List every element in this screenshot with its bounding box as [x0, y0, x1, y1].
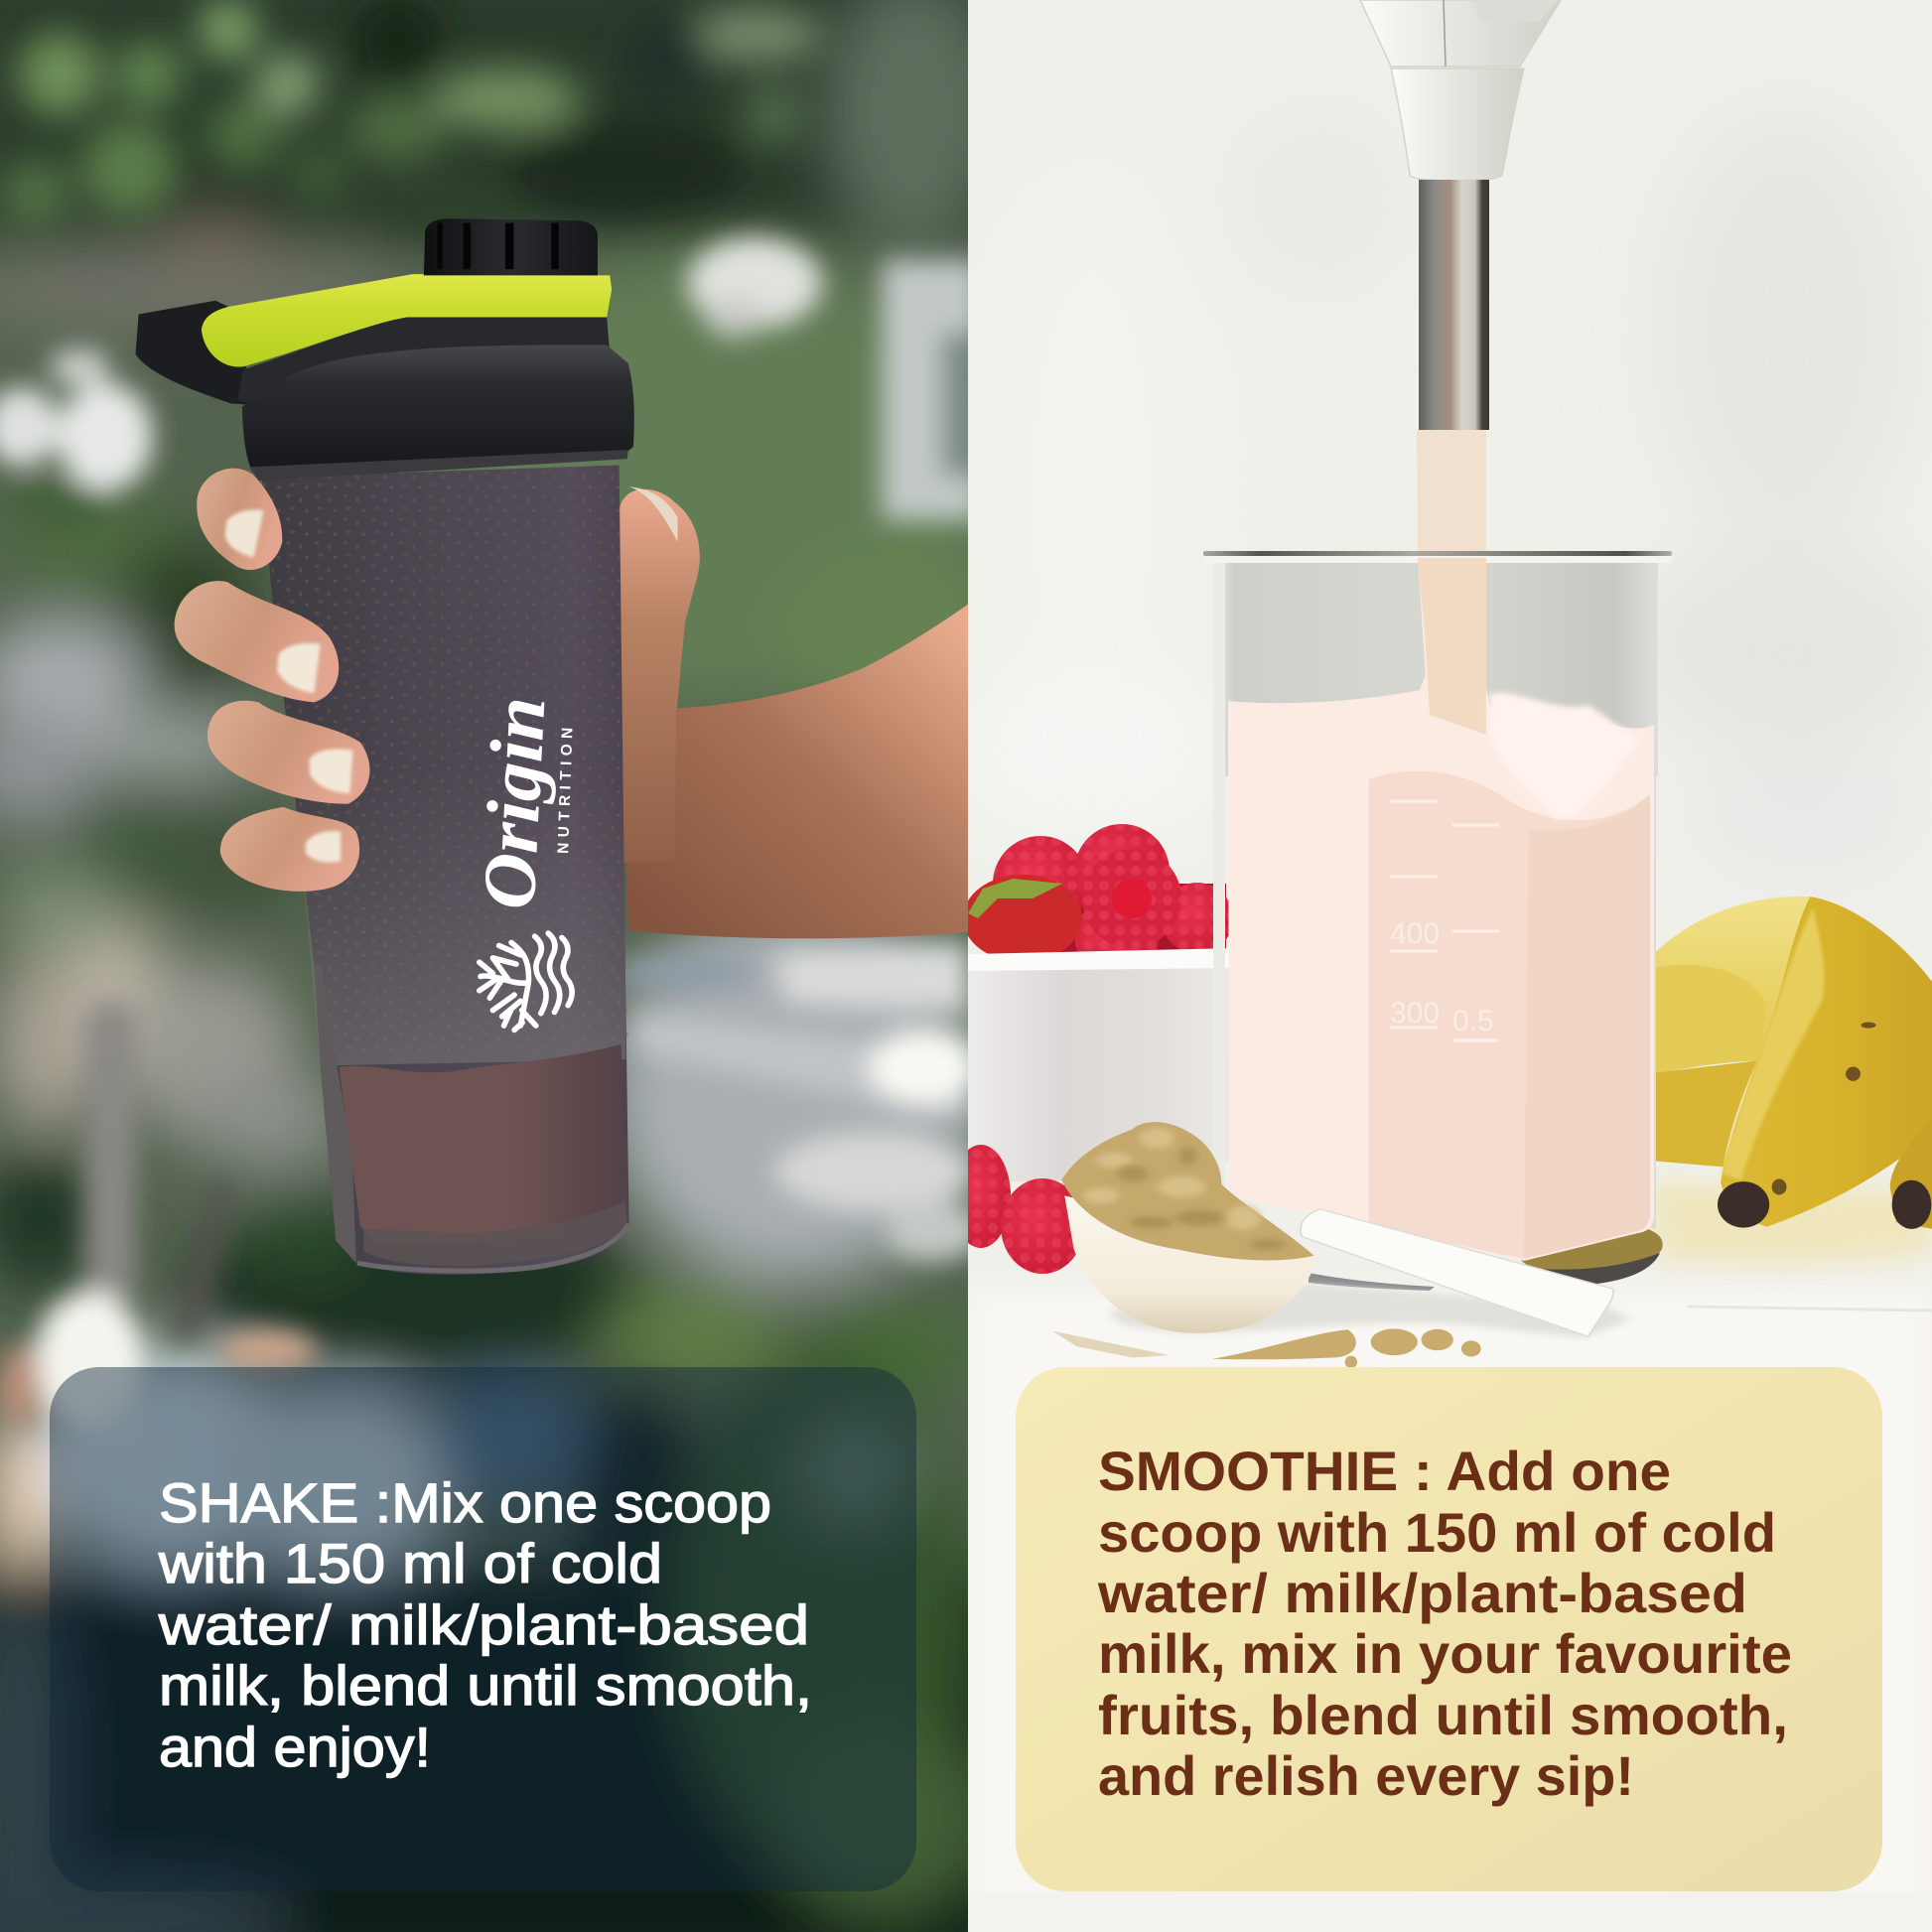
text: smoothie instructions: fruits, blend until smooth,	[1098, 1684, 1788, 1746]
text: shake instructions: and enjoy!	[159, 1716, 431, 1778]
text: shake instructions: water/ milk/plant-based	[158, 1593, 809, 1656]
text: smoothie instructions: water/ milk/plant-based	[1097, 1562, 1747, 1624]
icon: tree and waves emblem	[480, 933, 572, 1030]
shaker cap	[424, 218, 598, 275]
text: smoothie instructions: milk, mix in your favourite	[1098, 1622, 1792, 1685]
text: shake instructions	[158, 1471, 812, 1778]
spilled powder	[1052, 1328, 1481, 1368]
loose raspberries	[951, 1145, 1084, 1274]
bottle logo: Origin Nutrition: NUTRITION	[555, 727, 577, 854]
text: smoothie instructions: scoop with 150 ml of cold	[1098, 1501, 1776, 1564]
smoothie	[1228, 558, 1654, 1261]
scoop handle	[1301, 1209, 1613, 1336]
arm	[620, 489, 973, 938]
panel: shake instructions	[50, 1367, 916, 1891]
immersion blender	[1360, 0, 1561, 556]
jar measurement marks: 300	[1390, 997, 1440, 1030]
text: smoothie instructions: and relish every sip!	[1098, 1744, 1634, 1807]
jar base ring	[1519, 1229, 1663, 1276]
bottle logo: Origin Nutrition: Origin	[468, 695, 562, 911]
text: shake instructions: milk, blend until smooth,	[159, 1654, 812, 1717]
panel: shake photo	[0, 0, 1018, 1932]
jar measurement marks	[1390, 801, 1499, 1040]
panel: smoothie photo	[951, 0, 1932, 1932]
scoop bowl	[1064, 1195, 1317, 1333]
shaker bottle body	[259, 462, 634, 1275]
jar measurement marks: 400	[1390, 917, 1440, 950]
shaker lid	[242, 345, 634, 481]
blender shaft coated in smoothie	[1417, 430, 1486, 556]
fingers	[175, 469, 678, 892]
raspberries and strawberry	[963, 824, 1233, 980]
shaker strap and spout	[136, 274, 612, 407]
text: smoothie instructions: SMOOTHIE : Add one	[1098, 1440, 1671, 1502]
blender head	[1360, 0, 1561, 181]
scoop powder	[1061, 1122, 1314, 1260]
white bowl	[968, 948, 1236, 1181]
bananas	[1647, 897, 1932, 1231]
figure: hand holding shaker bottle	[136, 218, 973, 1275]
blender steel shaft	[1419, 180, 1489, 430]
jar measurement marks: 0.5	[1452, 1005, 1494, 1037]
text: shake instructions: SHAKE :Mix one scoop	[159, 1471, 771, 1534]
table shadows	[1108, 1285, 1631, 1337]
glass jar	[1203, 551, 1672, 1291]
text: shake instructions: with 150 ml of cold	[158, 1532, 662, 1594]
photo background: blurred garden	[0, 0, 1018, 1932]
protein scoop with powder	[1052, 1122, 1631, 1368]
panel: smoothie instructions	[1016, 1367, 1882, 1891]
banana shadow on table	[1648, 1181, 1932, 1266]
photo background: white wall and table	[963, 0, 1932, 1932]
text: smoothie instructions	[1097, 1440, 1792, 1807]
